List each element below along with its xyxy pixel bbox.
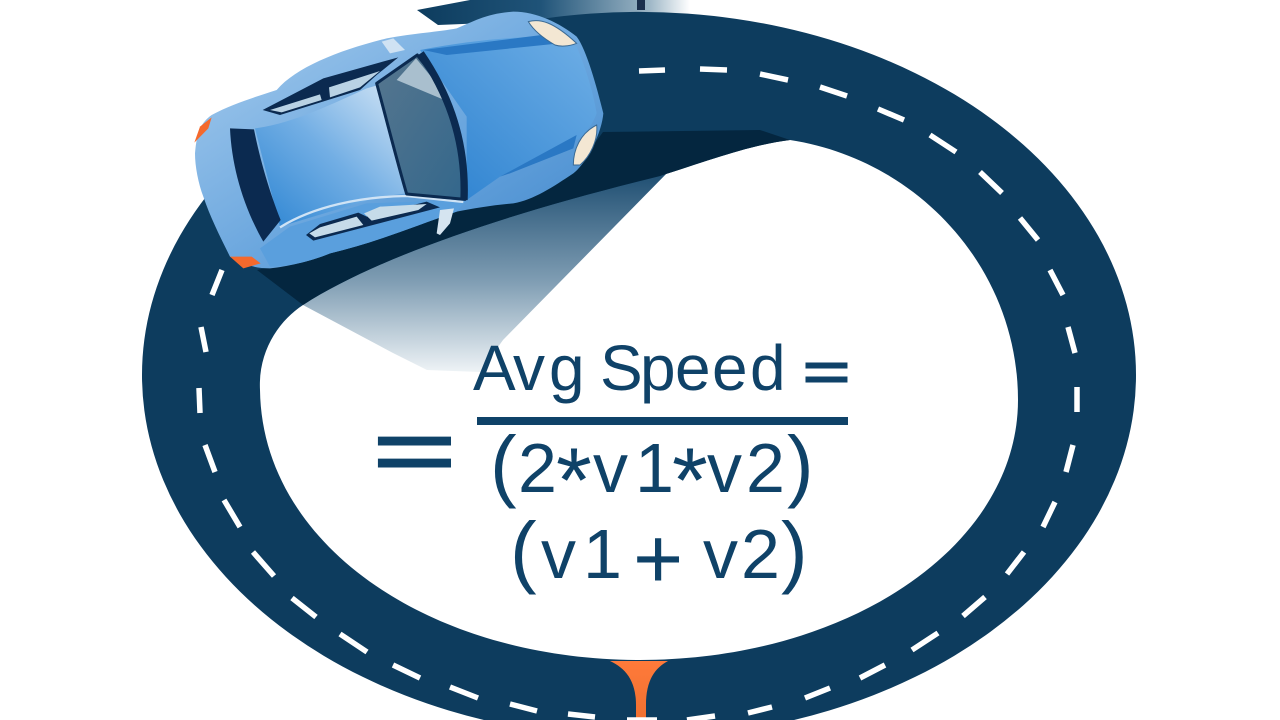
dark shadow on road under car bbox=[257, 130, 790, 305]
formula: first denominator line: ) bbox=[787, 420, 814, 509]
car body bbox=[195, 12, 603, 268]
roof lower edge highlight bbox=[280, 196, 463, 227]
hood stripe upper bbox=[423, 35, 553, 55]
windshield thick frame bbox=[421, 53, 464, 200]
side mirror lower bbox=[437, 208, 454, 235]
formula: second denominator line: 1 bbox=[583, 515, 622, 593]
headlight lower bbox=[573, 125, 597, 165]
roof bbox=[255, 85, 407, 227]
rear window bbox=[230, 128, 281, 242]
car shadow on ground bbox=[303, 170, 670, 372]
formula: second denominator line: 2 bbox=[741, 515, 780, 593]
formula: first denominator line: * bbox=[556, 430, 592, 532]
orange road marker bbox=[610, 661, 668, 720]
marker post at top bbox=[637, 0, 645, 10]
top road band bbox=[417, 0, 690, 25]
formula: second denominator line: v bbox=[541, 515, 576, 593]
formula: second denominator line: ( bbox=[510, 506, 537, 595]
formula: fraction bar bbox=[477, 417, 848, 425]
formula: first denominator line: v bbox=[707, 429, 742, 507]
formula: numerator label: Avg Speed bbox=[473, 332, 786, 404]
lower door band bbox=[260, 200, 467, 267]
formula: second denominator line: ) bbox=[781, 506, 808, 595]
lower side glass bbox=[309, 204, 427, 237]
formula: first denominator line: v bbox=[593, 429, 628, 507]
lower side window bbox=[306, 202, 440, 241]
tail light upper bbox=[194, 117, 212, 143]
formula: first denominator line: ( bbox=[490, 420, 517, 509]
hood stripe lower bbox=[500, 135, 577, 177]
tail light lower bbox=[230, 257, 261, 268]
hood bbox=[420, 37, 597, 200]
formula: second denominator line: + bbox=[633, 511, 683, 607]
upper side window bbox=[263, 57, 398, 115]
windshield highlight bbox=[397, 58, 448, 102]
formula: second denominator line: v bbox=[703, 515, 738, 593]
formula: first denominator line: 2 bbox=[746, 429, 785, 507]
formula: leading equals sign: = bbox=[373, 401, 456, 500]
road ring bbox=[142, 12, 1136, 720]
headlight upper bbox=[528, 21, 577, 46]
road centre dashes bbox=[199, 69, 1077, 720]
icon: blue sports car bbox=[194, 12, 603, 268]
side mirror upper bbox=[382, 38, 405, 53]
formula: first denominator line: 2 bbox=[518, 429, 557, 507]
formula: first denominator line: * bbox=[672, 430, 708, 532]
windshield bbox=[377, 55, 465, 199]
formula: first denominator line: 1 bbox=[635, 429, 674, 507]
upper side glass bbox=[270, 71, 380, 112]
formula bbox=[373, 332, 850, 607]
formula: numerator equals sign: = bbox=[803, 340, 850, 403]
